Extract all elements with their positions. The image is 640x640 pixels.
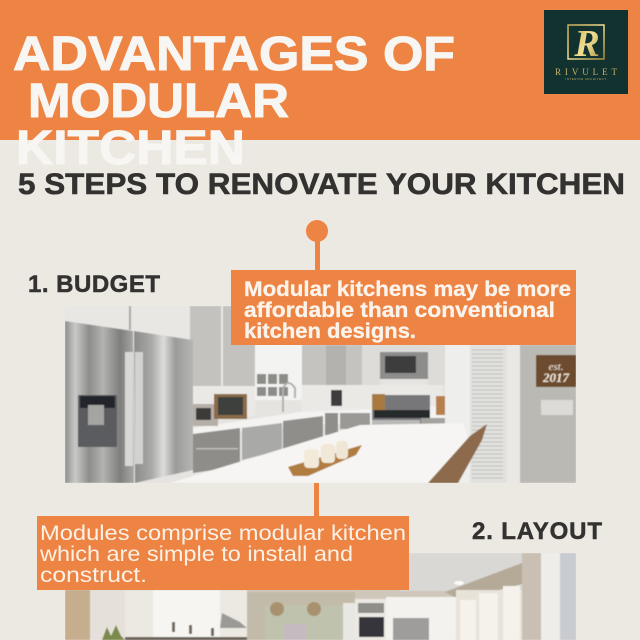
- fridge: [65, 321, 134, 483]
- timeline node and connector: [306, 220, 328, 271]
- callout 1: [231, 270, 576, 345]
- photo: kitchen with stainless fridge: est.: [549, 361, 563, 373]
- connector to callout 2: [314, 483, 319, 517]
- tray with candles: [288, 445, 362, 476]
- callout 2: which are simple to install and: [39, 543, 353, 566]
- chair: [428, 424, 487, 483]
- step 2 label: 2. LAYOUT: [472, 518, 602, 545]
- subtitle: 5 STEPS TO RENOVATE YOUR KITCHEN: [18, 168, 625, 201]
- wall sign: [536, 355, 576, 387]
- photo: kitchen layout: [65, 553, 576, 640]
- photo: kitchen with stainless fridge: [65, 306, 576, 483]
- title: KITCHEN: [16, 122, 245, 175]
- callout 2: construct.: [40, 564, 147, 587]
- logo: Rivulet: [544, 10, 628, 94]
- logo: Rivulet: INTERIOR ARCHITECT: [565, 77, 607, 81]
- logo: Rivulet: R: [573, 23, 600, 65]
- step 1 label: 1. BUDGET: [28, 271, 160, 298]
- counter and lower cabinets: [193, 407, 445, 434]
- louvered door: [470, 345, 507, 483]
- title: MODULAR: [28, 75, 289, 128]
- photo: kitchen with stainless fridge: 2017: [542, 370, 570, 385]
- callout 2: [37, 516, 409, 590]
- callout 1: kitchen designs.: [244, 320, 416, 343]
- title: [13, 28, 455, 175]
- callout 1: affordable than conventional: [244, 299, 555, 322]
- title: ADVANTAGES OF: [13, 28, 455, 81]
- small counter items: [193, 404, 218, 426]
- logo: Rivulet: RIVULET: [555, 67, 618, 77]
- callout 2: Modules comprise modular kitchen: [40, 522, 406, 545]
- header band: [0, 0, 640, 140]
- island: [170, 423, 470, 483]
- callout 1: Modular kitchens may be more: [244, 278, 571, 301]
